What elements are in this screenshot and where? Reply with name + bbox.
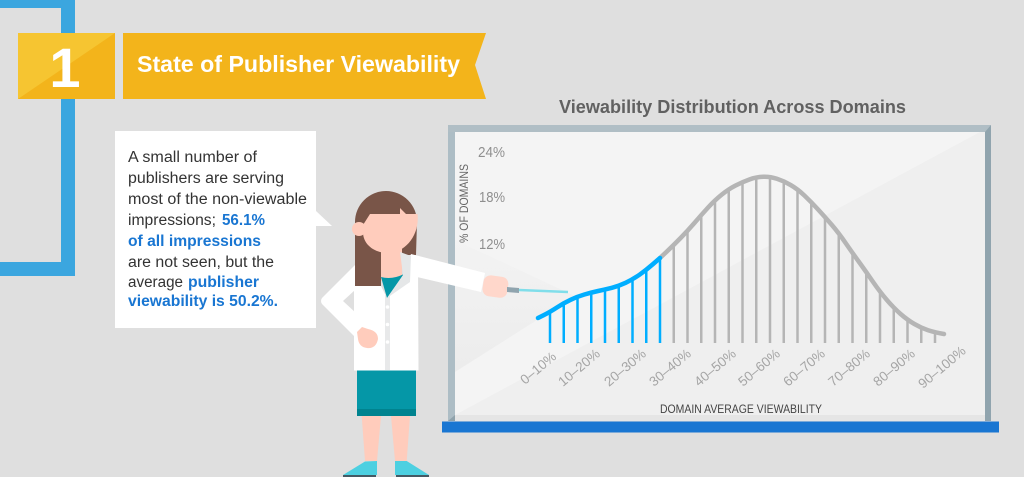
coat placket: [385, 295, 390, 370]
callout: speech bubble: publisher: [188, 274, 259, 291]
left arm: [321, 265, 356, 337]
y axis labels: 18%: [479, 189, 505, 206]
shoes: [343, 461, 429, 477]
gray distribution ticks: [674, 177, 935, 343]
x axis labels: [517, 343, 969, 391]
x axis labels: 40–50%: [691, 346, 739, 389]
y axis title: % OF DOMAINS: [457, 164, 471, 243]
x axis labels: 10–20%: [555, 346, 603, 389]
callout: speech bubble: are not seen, but the: [128, 254, 274, 271]
x axis labels: 60–70%: [780, 346, 828, 389]
section number badge: [18, 33, 115, 99]
y axis labels: 24%: [478, 144, 505, 161]
hair: [355, 191, 417, 286]
resting hand: [357, 327, 378, 348]
illustration: presenter: [321, 191, 568, 477]
x axis labels: 90–100%: [915, 343, 969, 391]
coat buttons: [386, 305, 389, 344]
pointing hand: [482, 274, 509, 299]
blue highlighted curve: [538, 258, 660, 318]
section number badge: 1: [49, 36, 81, 99]
callout: speech bubble: [115, 131, 332, 328]
bar chart: viewability distribution: [457, 144, 969, 416]
collar: [387, 252, 411, 298]
skirt: [357, 370, 416, 416]
y axis labels: 12%: [479, 236, 505, 253]
callout: speech bubble: average: [128, 274, 183, 291]
pointing arm: [411, 254, 485, 292]
callout: speech bubble: 56.1%: [222, 212, 265, 229]
x axis labels: 80–90%: [870, 346, 918, 389]
callout: speech bubble: A small number of: [128, 149, 258, 166]
x axis labels: 30–40%: [646, 346, 694, 389]
callout: speech bubble: publishers are serving: [128, 170, 284, 187]
callout: speech bubble: of all impressions: [128, 233, 261, 250]
blue highlighted ticks: [550, 258, 660, 343]
coat: [354, 254, 418, 370]
gray distribution curve: [660, 177, 944, 334]
heading ribbon: State of Publisher Viewability: [137, 51, 460, 77]
y axis labels: [478, 144, 505, 253]
pointer stick: [507, 287, 568, 293]
x axis labels: 0–10%: [517, 349, 559, 387]
legs: [362, 416, 410, 461]
x axis labels: 20–30%: [601, 346, 649, 389]
section bracket line: [0, 0, 75, 276]
shirt: [381, 274, 404, 298]
face: [363, 208, 418, 253]
x axis labels: 70–80%: [825, 346, 873, 389]
callout: speech bubble: impressions;: [128, 212, 216, 229]
board tray: [442, 422, 999, 432]
x axis labels: 50–60%: [735, 346, 783, 389]
chart title: Viewability Distribution Across Domains: [559, 96, 906, 117]
callout: speech bubble: viewability is 50.2%.: [128, 293, 278, 310]
heading ribbon: [123, 33, 486, 99]
x axis title: DOMAIN AVERAGE VIEWABILITY: [660, 404, 822, 416]
ear: [352, 222, 366, 236]
panel: presentation board: [448, 125, 991, 421]
neck: [381, 245, 402, 281]
callout: speech bubble: most of the non-viewable: [128, 191, 307, 208]
